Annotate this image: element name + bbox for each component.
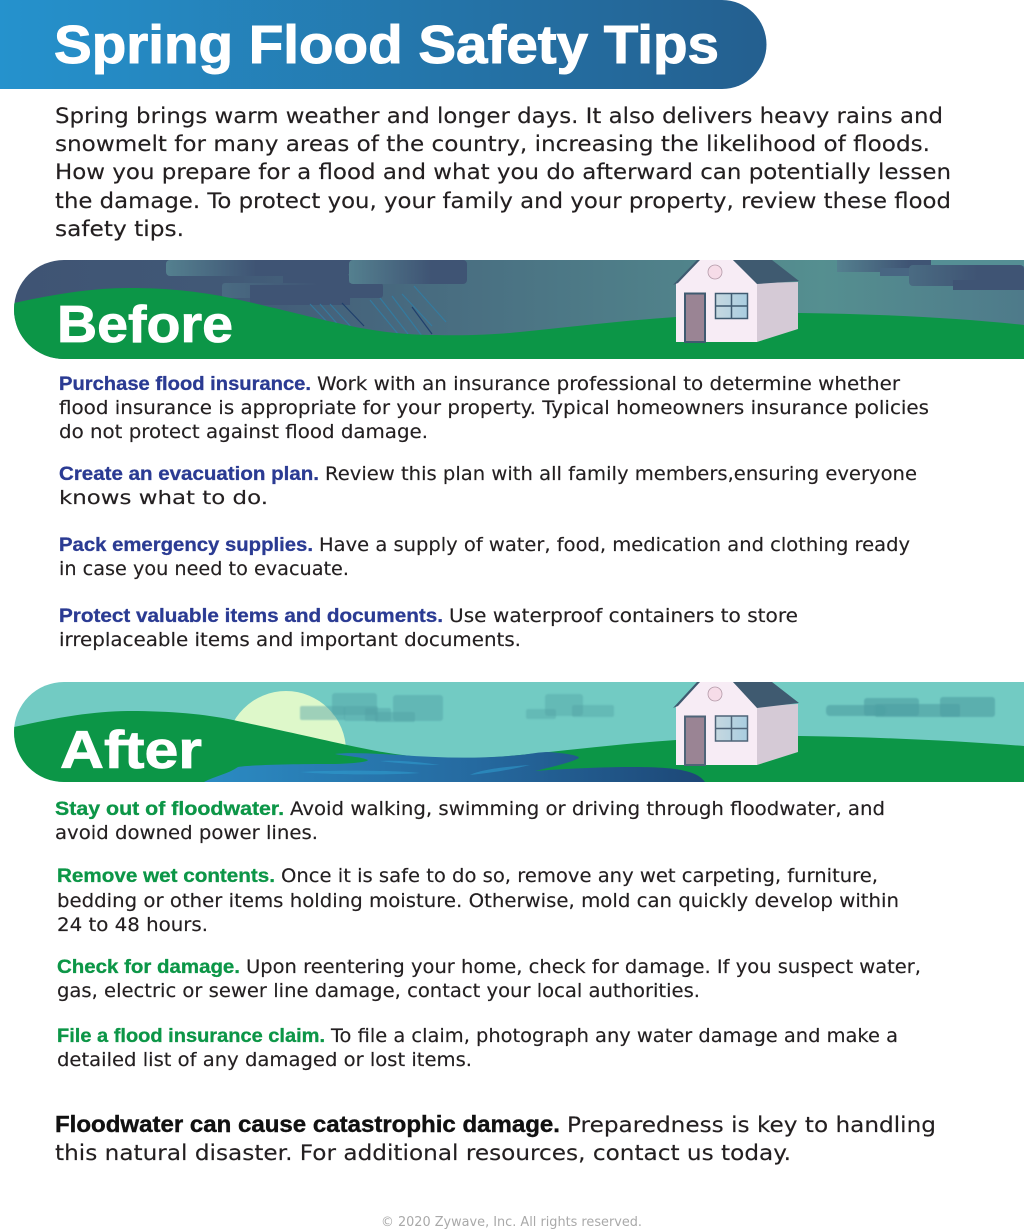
tip: evacuation plan: knows what to do. [59, 487, 268, 509]
tip: emergency supplies: Have a supply of water, food, medication and clothing ready [319, 534, 910, 556]
tip: check for damage [57, 956, 921, 1002]
copyright: © 2020 Zywave, Inc. All rights reserved. [381, 1215, 642, 1230]
tip: check for damage: Upon reentering your home, check for damage. If you suspect water, [246, 956, 921, 978]
closing statement [55, 1111, 936, 1166]
intro paragraph: Spring brings warm weather and longer days. It also delivers heavy rains and [55, 104, 943, 129]
panel: after banner [14, 682, 1024, 782]
icon: storm clouds left [166, 260, 467, 305]
closing statement: Floodwater can cause catastrophic damage. [55, 1111, 560, 1137]
tip: stay out of floodwater: Stay out of floodwater. [55, 798, 284, 820]
icon: clouds near sun [300, 693, 443, 722]
title banner: Spring Flood Safety Tips [54, 15, 719, 75]
green hill [14, 288, 1024, 359]
heading: Before: Before [57, 296, 233, 354]
tip: emergency supplies: Pack emergency supplies. [59, 534, 313, 556]
tip: file a claim: File a flood insurance claim. [57, 1025, 325, 1047]
icon: floodwater [204, 752, 705, 782]
title banner [0, 0, 767, 89]
tip: evacuation plan [59, 463, 917, 509]
tip: stay out of floodwater [55, 798, 885, 844]
intro paragraph [55, 104, 951, 242]
tip: file a claim [57, 1025, 898, 1071]
tip: remove wet contents: bedding or other items holding moisture. Otherwise, mold can quickly develop within [57, 890, 899, 912]
icon: clouds right [826, 697, 995, 717]
tip: valuable items [59, 605, 798, 651]
before tips text [59, 373, 929, 651]
icon: house [673, 682, 799, 765]
tip: purchase flood insurance: Work with an insurance professional to determine whether [317, 373, 900, 395]
intro paragraph: the damage. To protect you, your family and your property, review these flood [55, 189, 951, 214]
icon: rain streaks [310, 286, 446, 336]
closing statement: Preparedness is key to handling [567, 1113, 936, 1138]
tip: stay out of floodwater: Avoid walking, swimming or driving through floodwater, and [290, 798, 885, 820]
tip: purchase flood insurance [59, 373, 929, 443]
closing statement: this natural disaster. For additional resources, contact us today. [55, 1141, 791, 1166]
icon: clouds middle [526, 694, 614, 719]
tip: remove wet contents [57, 865, 899, 936]
tip: file a claim: detailed list of any damaged or lost items. [57, 1049, 472, 1071]
icon: storm clouds right [837, 260, 1024, 290]
tip: purchase flood insurance: Purchase flood insurance. [59, 373, 311, 395]
tip: file a claim: To file a claim, photograph any water damage and make a [330, 1025, 898, 1047]
tip: valuable items: Use waterproof containers to store [449, 605, 798, 627]
tip: remove wet contents: Once it is safe to do so, remove any wet carpeting, furniture, [281, 865, 878, 887]
tip: evacuation plan: Create an evacuation plan. [59, 463, 319, 485]
tip: emergency supplies: in case you need to evacuate. [59, 558, 349, 580]
intro paragraph: snowmelt for many areas of the country, increasing the likelihood of floods. [55, 132, 930, 157]
intro paragraph: safety tips. [55, 217, 184, 242]
green hill [14, 711, 1024, 782]
tip: remove wet contents: Remove wet contents. [57, 865, 275, 887]
tip: purchase flood insurance: flood insurance is appropriate for your property. Typical homeowners insurance policies [59, 397, 929, 419]
tip: stay out of floodwater: avoid downed power lines. [55, 822, 318, 844]
intro paragraph: How you prepare for a flood and what you do afterward can potentially lessen [55, 160, 951, 185]
tip: valuable items: Protect valuable items and documents. [59, 605, 443, 627]
tip: check for damage: gas, electric or sewer line damage, contact your local authorities. [57, 980, 700, 1002]
icon: sun [234, 691, 346, 745]
heading: After: After [60, 721, 202, 780]
panel: before banner [14, 260, 1024, 359]
tip: check for damage: Check for damage. [57, 956, 240, 978]
tip: remove wet contents: 24 to 48 hours. [57, 914, 208, 936]
tip: valuable items: irreplaceable items and important documents. [59, 629, 521, 651]
icon: house [673, 260, 799, 342]
tip: emergency supplies [59, 534, 910, 580]
tip: purchase flood insurance: do not protect against flood damage. [59, 421, 428, 443]
after tips text [55, 798, 921, 1071]
tip: evacuation plan: Review this plan with all family members,ensuring everyone [325, 463, 917, 485]
